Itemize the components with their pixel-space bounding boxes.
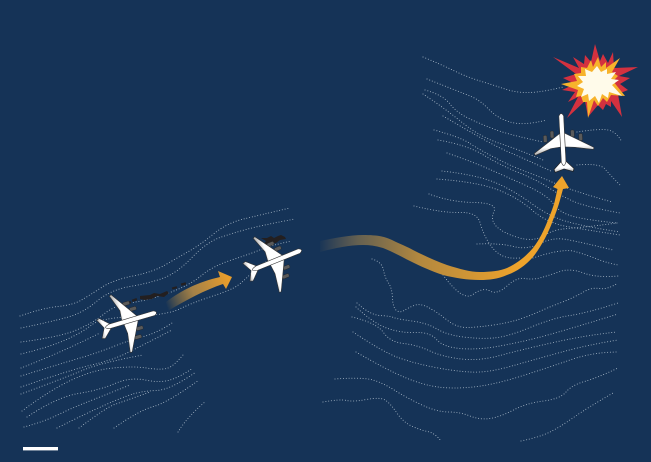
wings — [253, 230, 295, 294]
engines — [122, 299, 146, 340]
scale bar — [23, 447, 58, 450]
arrow: long curved path to explosion — [320, 176, 569, 280]
plane 3 — [532, 112, 595, 173]
engines — [543, 129, 583, 142]
tail — [242, 258, 262, 282]
tail — [554, 159, 574, 172]
contour lines: right air current — [323, 57, 622, 441]
engines — [267, 239, 293, 280]
fuselage — [105, 310, 157, 330]
fuselage — [252, 248, 302, 272]
wings — [109, 289, 147, 354]
fuselage — [559, 113, 566, 166]
smoke trail: second plane — [261, 235, 286, 246]
plane 2 — [235, 222, 313, 301]
explosion: red spikes — [553, 44, 638, 118]
smoke trail: first plane — [126, 282, 186, 305]
plane 1 — [91, 284, 165, 359]
explosion: orange spikes — [561, 57, 625, 118]
explosion: white core — [577, 66, 622, 103]
tail — [96, 316, 115, 339]
explosion — [553, 44, 638, 118]
arrow: first movement — [166, 271, 232, 311]
wings — [533, 131, 594, 155]
contour lines: left air current — [20, 208, 295, 432]
